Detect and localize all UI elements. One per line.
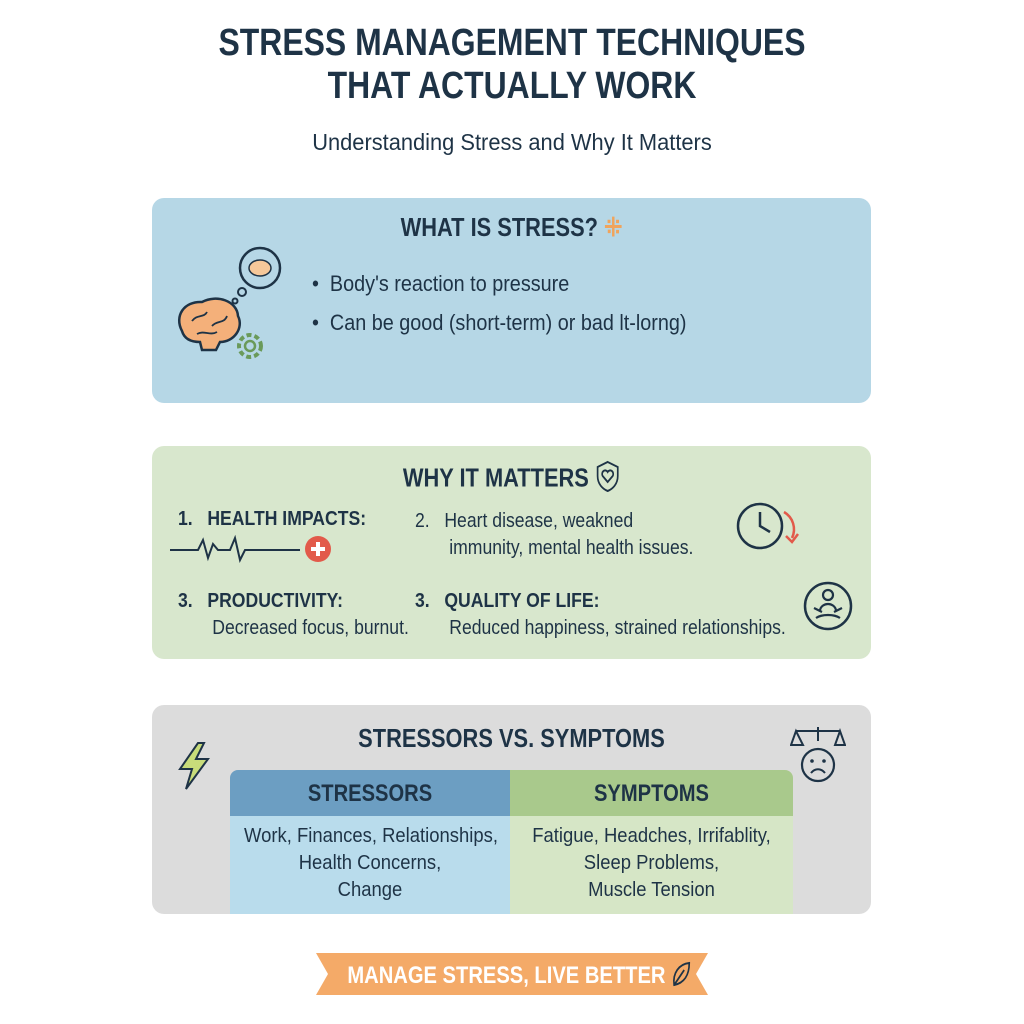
- table: symptoms column: Muscle Tension: [588, 878, 715, 901]
- item 4: Reduced happiness, strained relationships.: [449, 617, 786, 639]
- subtitle: Understanding Stress and Why It Matters: [312, 129, 712, 155]
- icon: brain with thought bubble: [178, 246, 282, 359]
- table: stressors column: STRESSORS: [308, 780, 432, 807]
- ribbon banner: [316, 953, 708, 995]
- table: stressors column: [230, 770, 510, 914]
- item 1: 1. HEALTH IMPACTS:: [178, 508, 366, 530]
- heading: WHAT IS STRESS? ⁜: [401, 212, 622, 242]
- heading: STRESSORS VS. SYMPTOMS: [358, 723, 665, 753]
- table: symptoms column: Fatigue, Headches, Irrifablity,: [532, 824, 771, 847]
- title: STRESS MANAGEMENT TECHNIQUES: [218, 22, 806, 64]
- item 2: [415, 510, 693, 559]
- bullets: [312, 271, 686, 335]
- panel: why it matters: [152, 446, 871, 659]
- item 3: 3. PRODUCTIVITY:: [178, 590, 343, 612]
- bullets: • Body's reaction to pressure: [312, 271, 569, 296]
- icon: clock: [736, 502, 799, 550]
- bullets: • Can be good (short-term) or bad lt-lorng): [312, 310, 686, 335]
- table: symptoms column: SYMPTOMS: [594, 780, 709, 807]
- table: stressors column: Health Concerns,: [299, 851, 441, 874]
- title: THAT ACTUALLY WORK: [328, 65, 696, 107]
- table: stressors column: Work, Finances, Relationships,: [244, 824, 498, 847]
- item 4: 3. QUALITY OF LIFE:: [415, 590, 599, 612]
- table: stressors column: Change: [338, 878, 402, 901]
- heading: WHY IT MATTERS: [403, 462, 589, 492]
- item 2: immunity, mental health issues.: [449, 537, 693, 559]
- panel: stressors vs symptoms: [152, 705, 871, 914]
- table: symptoms column: Sleep Problems,: [584, 851, 719, 874]
- item 3: [178, 590, 409, 639]
- item 3: Decreased focus, burnut.: [212, 617, 409, 639]
- item 2: 2. Heart disease, weakned: [415, 510, 633, 532]
- table: symptoms column: [510, 770, 793, 914]
- title: [218, 22, 806, 107]
- ribbon banner: MANAGE STRESS, LIVE BETTER: [347, 962, 665, 989]
- icon: meditation: [804, 582, 852, 630]
- icon: lightning: [178, 742, 210, 790]
- panel: what is stress: [152, 198, 871, 403]
- item 4: [415, 590, 786, 639]
- icon: ecg with cross: [170, 534, 331, 563]
- icon: scales with sad face: [790, 727, 846, 782]
